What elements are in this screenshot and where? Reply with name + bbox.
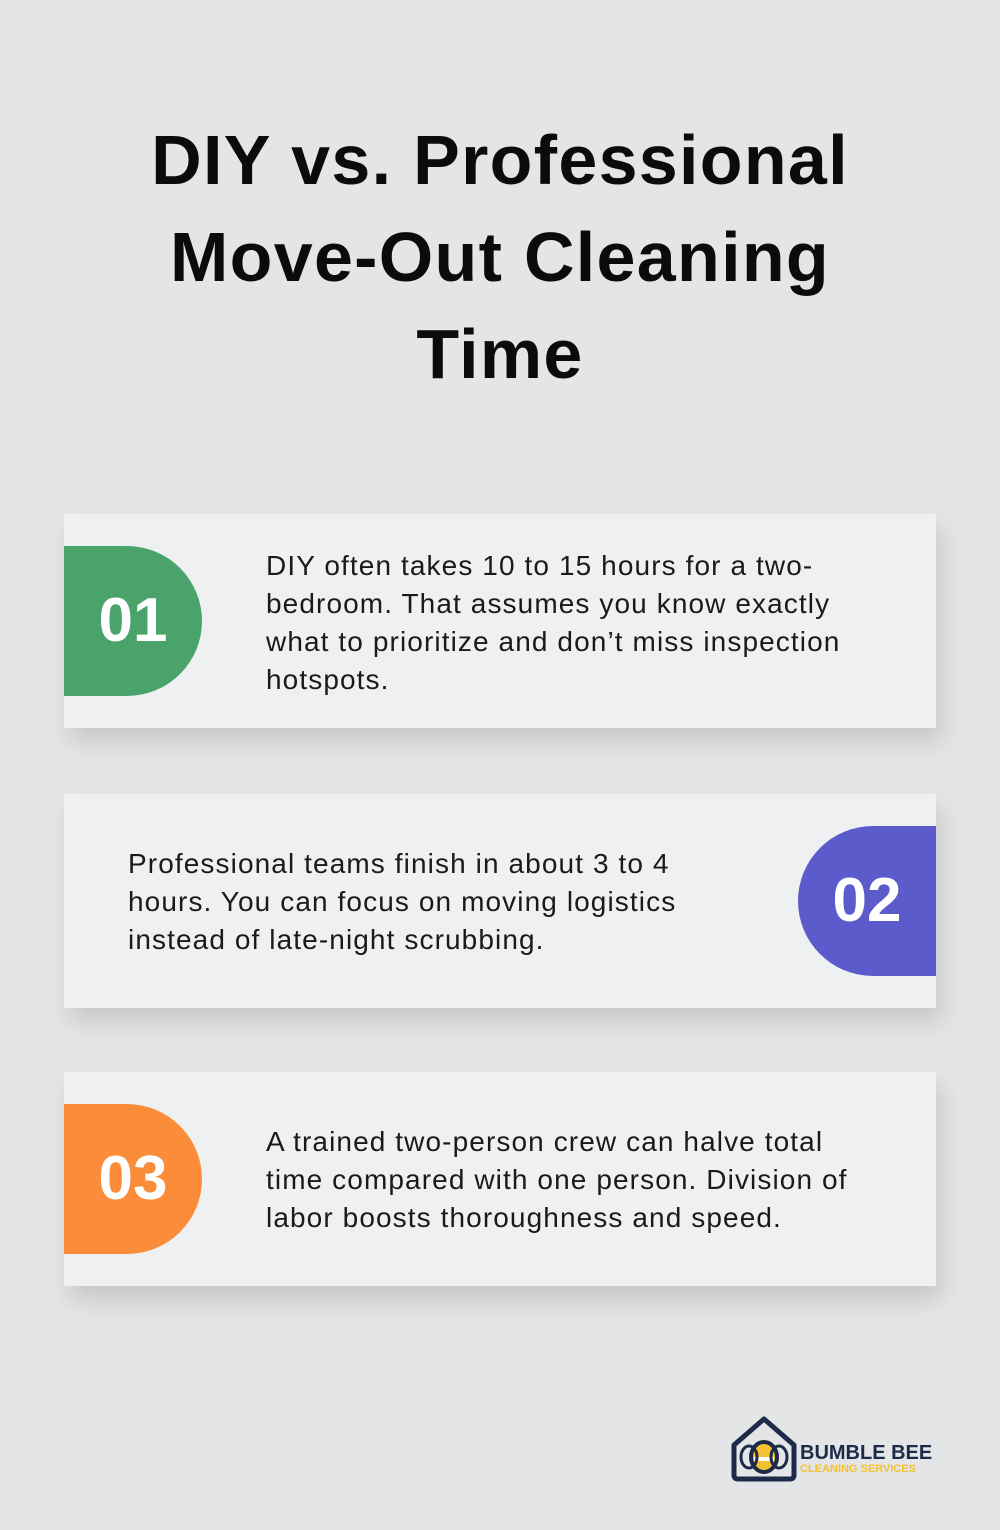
title: Time: [416, 315, 584, 393]
logo text: CLEANING SERVICES: [800, 1463, 916, 1475]
text 02: [128, 848, 676, 955]
icon: bee house: [732, 1416, 796, 1482]
logo: [732, 1416, 932, 1482]
title: DIY vs. Professional: [151, 121, 849, 199]
badge 02: [798, 826, 936, 976]
text 02: Professional teams finish in about 3 to 4: [128, 848, 670, 879]
badge 03: [64, 1104, 202, 1254]
text 01: what to prioritize and don’t miss inspection: [266, 626, 840, 657]
text 01: bedroom. That assumes you know exactly: [266, 588, 830, 619]
card 03: [64, 1072, 936, 1286]
text 01: hotspots.: [266, 664, 390, 695]
card 02: [64, 794, 936, 1008]
text 02: hours. You can focus on moving logistics: [128, 886, 676, 917]
badge 01: [64, 546, 202, 696]
text 03: A trained two-person crew can halve total: [266, 1126, 823, 1157]
text 03: labor boosts thoroughness and speed.: [266, 1202, 782, 1233]
title: [151, 121, 849, 393]
title: Move-Out Cleaning: [170, 218, 830, 296]
card 01: [64, 514, 936, 728]
badge 02: 02: [833, 866, 901, 935]
logo text: [800, 1442, 932, 1475]
logo text: BUMBLE BEE: [800, 1442, 932, 1464]
text 03: [266, 1126, 848, 1233]
text 01: DIY often takes 10 to 15 hours for a two-: [266, 550, 813, 581]
badge 03: 03: [99, 1144, 167, 1213]
text 01: [266, 550, 840, 695]
badge 01: 01: [99, 586, 167, 655]
text 02: instead of late-night scrubbing.: [128, 924, 545, 955]
text 03: time compared with one person. Division of: [266, 1164, 848, 1195]
